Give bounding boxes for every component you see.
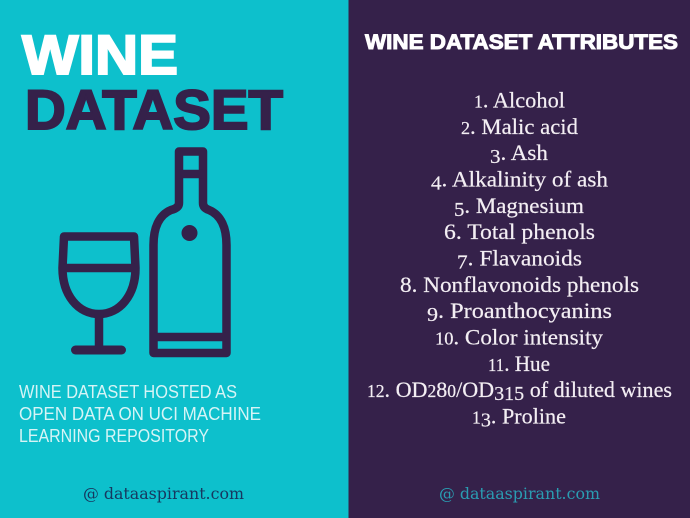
icon: wine bottle: [154, 152, 226, 353]
text block: description of dataset hosting: WINE DATASET HOSTED AS: [19, 381, 237, 402]
list: 13 attributes: 4: [431, 172, 442, 194]
list: 13 attributes: 5: [454, 199, 464, 221]
list: 13 attributes: 3: [490, 146, 500, 168]
list: 13 attributes: 7: [457, 252, 468, 274]
title: DATASET: DATASET: [25, 79, 283, 141]
list: 13 attributes: . Magnesium: [464, 193, 584, 218]
panel: right purple background: [348, 0, 690, 518]
list: 13 attributes: of diluted wines: [524, 377, 672, 402]
list: 13 attributes: 315: [494, 383, 524, 405]
list: 13 attributes: . Flavanoids: [468, 246, 582, 270]
list: 13 attributes: 11. Hue: [488, 351, 550, 376]
text block: description of dataset hosting: OPEN DATA ON UCI MACHINE: [19, 403, 261, 424]
list: 13 attributes: 3: [481, 410, 491, 432]
list: 13 attributes: 2. Malic acid: [461, 114, 578, 139]
list: 13 attributes: 10. Color intensity: [435, 324, 603, 350]
list: 13 attributes: 9: [427, 304, 438, 326]
icon: wine glass: [62, 236, 136, 350]
list: 13 attributes: . Ash: [500, 140, 548, 165]
list: 13 attributes: . Proline: [491, 404, 566, 428]
text block: description of dataset hosting: LEARNING REPOSITORY: [19, 425, 209, 446]
footer: left site credit: @ dataaspirant.com: [83, 485, 244, 503]
list: 13 attributes: 12. OD280/OD: [367, 377, 494, 402]
list: 13 attributes: 1. Alcohol: [474, 88, 565, 112]
footer: right site credit: @ dataaspirant.com: [439, 485, 600, 503]
list: 13 attributes: 6. Total phenols: [444, 219, 595, 244]
list: 13 attributes: 1: [472, 408, 481, 428]
list: 13 attributes: . Proanthocyanins: [438, 298, 612, 323]
panel: left teal background: [0, 0, 348, 518]
title: WINE: WINE: [22, 24, 178, 86]
text block: description of dataset hosting: [19, 381, 261, 446]
list: 13 attributes: 8. Nonflavonoids phenols: [400, 272, 639, 297]
list: 13 attributes: . Alkalinity of ash: [442, 166, 608, 192]
list: 13 attributes: [367, 88, 672, 432]
heading: wine dataset attributes: WINE DATASET ATTRIBUTES: [365, 30, 678, 54]
